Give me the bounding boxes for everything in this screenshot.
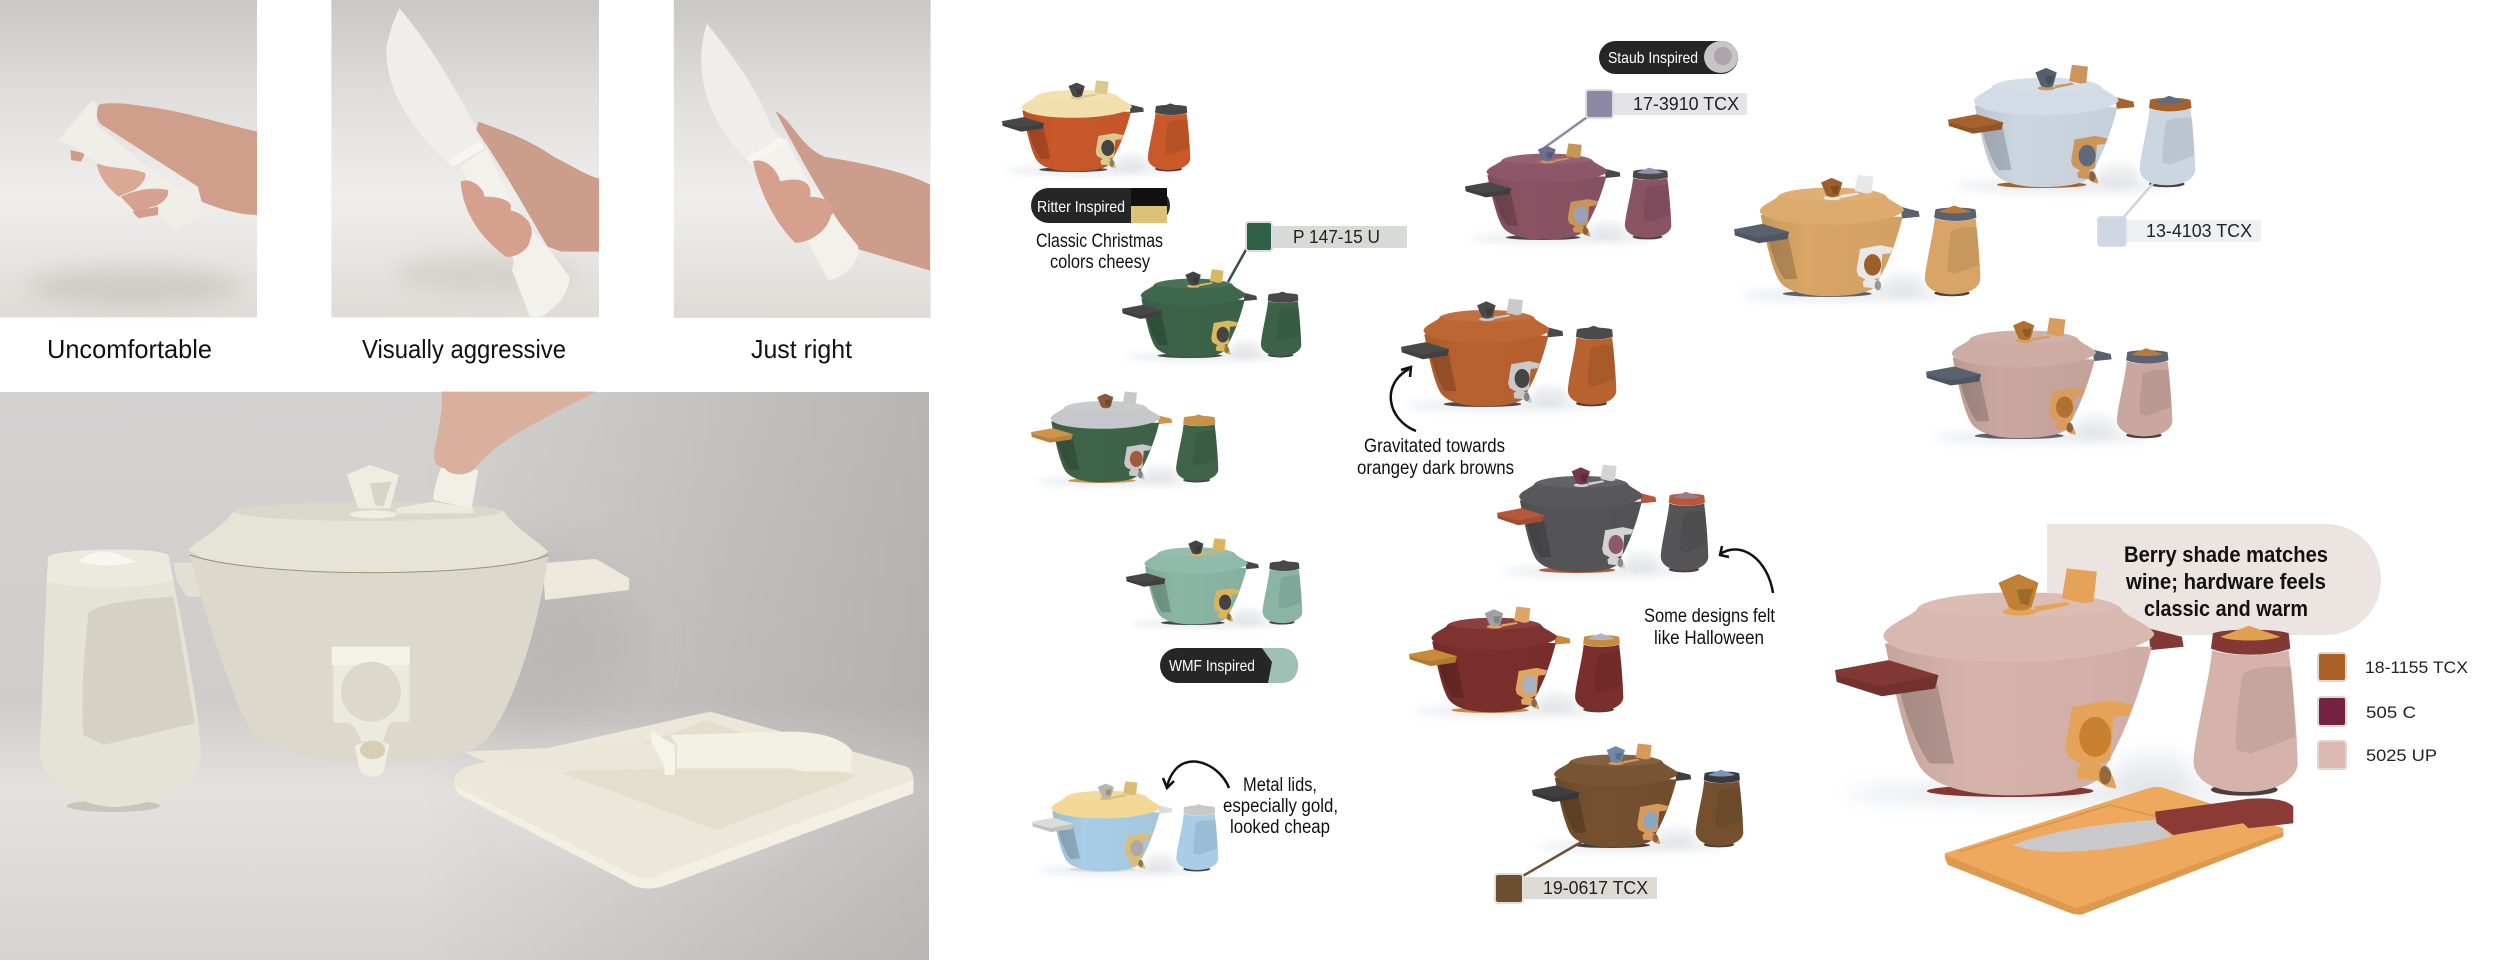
product set: pale blue-grey <box>1948 65 2195 192</box>
note: Gravitated towards orangey dark browns: orangey dark browns <box>1357 458 1514 479</box>
colour code: P 147-15 U <box>1228 222 1407 282</box>
product set: tan <box>1734 175 1980 301</box>
caption: Uncomfortable: Uncomfortable <box>47 334 212 364</box>
note: Gravitated towards orangey dark browns <box>1357 436 1514 479</box>
note: Classic Christmas colors cheesy: Classic Christmas <box>1036 231 1163 252</box>
note: Metal lids: especially gold, <box>1223 796 1338 817</box>
note: Gravitated towards orangey dark browns: Gravitated towards <box>1364 436 1505 457</box>
colour legend: 18-1155 TCX <box>2365 658 2468 677</box>
product set: charcoal <box>1497 465 1708 576</box>
note: Metal lids: Metal lids, <box>1243 775 1317 796</box>
colour legend <box>2318 653 2468 769</box>
arrow: to charcoal set <box>1720 546 1773 593</box>
product set: mint <box>1126 538 1302 628</box>
note: Classic Christmas colors cheesy <box>1036 231 1163 273</box>
product set: green with silver lid <box>1031 391 1218 486</box>
colour legend: 505 C <box>2366 703 2416 722</box>
product set: dusty pink <box>1926 318 2172 443</box>
product set: orange with cream lid <box>1002 80 1190 175</box>
colour code: 17-3910 TCX <box>1544 90 1747 148</box>
colour code: 19-0617 TCX <box>1495 841 1657 903</box>
colour code: 17-3910 TCX: 17-3910 TCX <box>1633 94 1739 114</box>
product set: mauve <box>1465 143 1671 243</box>
tag: Ritter Inspired: Ritter Inspired <box>1037 199 1125 216</box>
photo: just right knife grip <box>674 0 931 318</box>
note: Classic Christmas colors cheesy: colors cheesy <box>1050 252 1150 273</box>
note: Some designs felt like Halloween: Some designs felt <box>1644 606 1776 627</box>
caption: Just right: Just right <box>751 334 853 364</box>
tag: WMF Inspired <box>1160 648 1298 683</box>
caption: Visually aggressive: Visually aggressive <box>362 334 566 364</box>
note: Metal lids <box>1223 775 1338 838</box>
product set: light blue with gold lid <box>1032 781 1218 875</box>
colour code: 13-4103 TCX <box>2098 181 2261 246</box>
note: Metal lids: looked cheap <box>1230 817 1330 838</box>
tag: Staub Inspired: Staub Inspired <box>1608 50 1698 67</box>
tag: Ritter Inspired <box>1031 188 1170 223</box>
callout: berry shade: Berry shade matches <box>2124 542 2328 567</box>
product set: forest green <box>1122 269 1301 361</box>
tag: Staub Inspired <box>1599 41 1738 74</box>
colour code: P 147-15 U: P 147-15 U <box>1293 227 1380 247</box>
callout: berry shade: wine; hardware feels <box>2125 569 2326 594</box>
callout: berry shade <box>2047 524 2381 635</box>
colour legend: 5025 UP <box>2366 746 2437 765</box>
photo: cream 3D printed prototype set <box>0 392 929 960</box>
callout: berry shade: classic and warm <box>2144 596 2308 621</box>
colour code: 13-4103 TCX: 13-4103 TCX <box>2146 221 2252 241</box>
photo: uncomfortable knife grip <box>0 0 257 317</box>
product set: burgundy <box>1409 607 1623 716</box>
note: Some designs felt like Halloween: like Halloween <box>1654 628 1764 649</box>
product set: terracotta <box>1401 299 1616 410</box>
note: Some designs felt like Halloween <box>1644 606 1776 649</box>
tag: WMF Inspired: WMF Inspired <box>1169 658 1255 675</box>
final product set: berry and pink <box>1835 568 2298 804</box>
colour code: 19-0617 TCX: 19-0617 TCX <box>1543 878 1648 898</box>
photo: visually aggressive knife grip <box>331 0 599 317</box>
arrow: to terracotta set <box>1391 367 1416 431</box>
arrow: to metal lid <box>1163 762 1229 788</box>
product set: chocolate brown <box>1532 744 1743 851</box>
cutting board with knife <box>1945 787 2293 915</box>
